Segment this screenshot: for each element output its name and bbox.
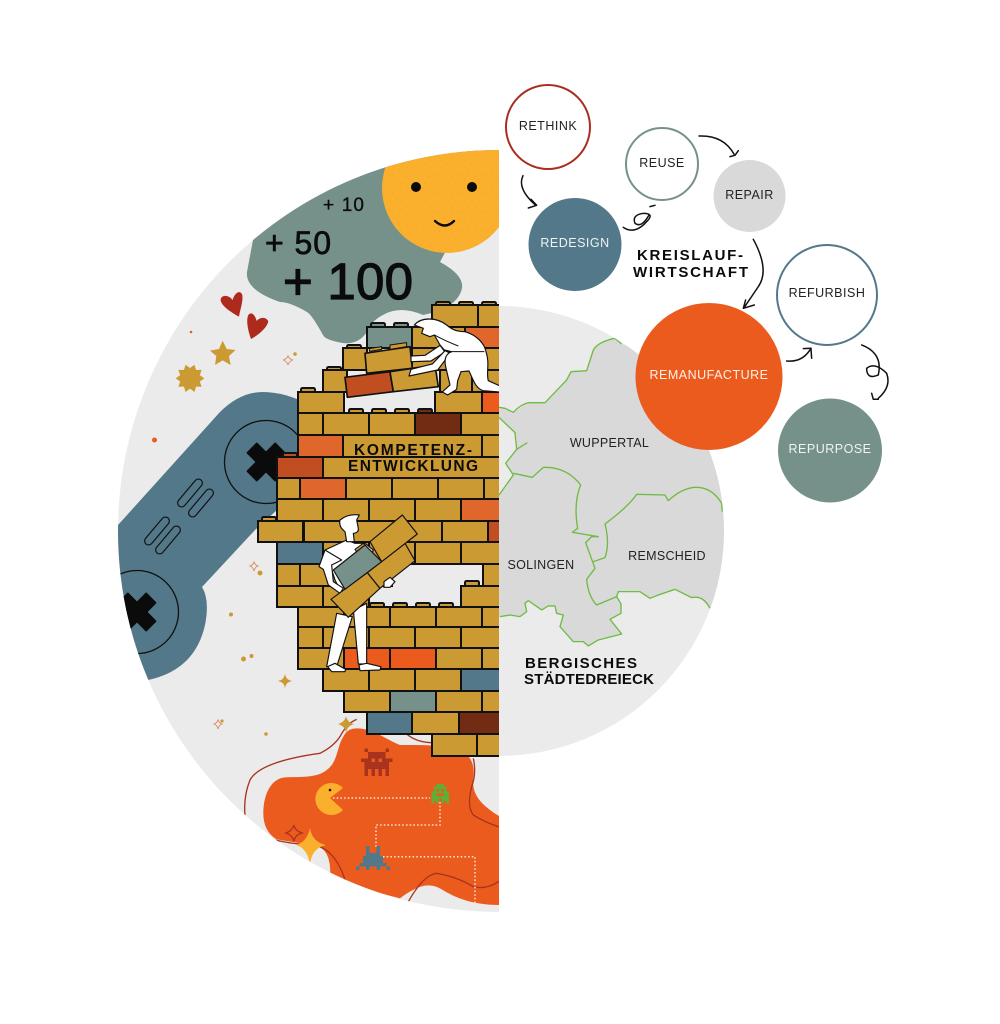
icon: pacman <box>315 783 343 815</box>
icon: gold sparkle in field <box>296 828 326 864</box>
circle: Remanufacture: REMANUFACTURE <box>649 368 769 382</box>
icon: heart one <box>221 292 243 317</box>
arrow: rethink to redesign <box>521 176 537 208</box>
small scattered dots and sparkles <box>152 331 354 736</box>
map of the three cities <box>499 338 735 646</box>
circle: Refurbish: REFURBISH <box>789 286 865 300</box>
arrow: repair to remanufacture <box>743 239 763 308</box>
wall label line 1: Kompetenz: KOMPETENZ- <box>354 442 472 459</box>
arrow: remanufacture to refurbish <box>787 348 812 361</box>
heading: Kreislaufwirtschaft <box>633 247 748 281</box>
hearts and stars group <box>176 292 268 392</box>
arrow: refurbish to repurpose <box>862 345 888 399</box>
heading: Bergisches Städtedreieck: STÄDTEDREIECK <box>524 671 654 688</box>
middle wall rows <box>258 521 503 627</box>
arrow: redesign to reuse <box>623 205 655 230</box>
red contour lines <box>245 719 500 902</box>
circle: Reuse <box>626 128 698 200</box>
heading: Bergisches Städtedreieck: BERGISCHES <box>525 655 637 672</box>
arrows between the circles <box>521 136 888 399</box>
circle: Rethink: RETHINK <box>519 119 577 133</box>
label: Remscheid: REMSCHEID <box>628 549 706 563</box>
circle: Repair: REPAIR <box>725 188 774 202</box>
brick wall <box>258 302 503 756</box>
wall label line 2: Entwicklung: ENTWICKLUNG <box>348 458 478 475</box>
panel: right half disc Bergisches Städtedreieck <box>499 306 735 756</box>
circle: Remanufacture <box>636 303 782 450</box>
blob: orange game field <box>263 728 500 905</box>
circle: Repair <box>714 160 786 232</box>
brick studs <box>262 302 496 607</box>
map labels <box>508 436 706 572</box>
icon: teal space invader <box>356 846 390 870</box>
icon: red space invader <box>361 748 392 776</box>
circle: Refurbish <box>777 245 877 345</box>
icon: green ghost <box>432 784 449 803</box>
circle: Repurpose: REPURPOSE <box>788 442 872 456</box>
figure: man carrying bricks <box>319 515 417 672</box>
panel: left half disc with game scene <box>118 150 499 912</box>
circle: Rethink <box>506 85 590 169</box>
label: Wuppertal: WUPPERTAL <box>570 436 649 450</box>
circle: Repurpose <box>778 398 882 502</box>
icon: heart two <box>247 313 268 339</box>
blob: score background <box>247 150 499 343</box>
circle: Reuse: REUSE <box>639 156 685 170</box>
arrow: reuse to repair <box>699 136 738 157</box>
game controller <box>118 392 297 680</box>
icon: gold spiky sun <box>176 365 204 392</box>
orange game field group <box>245 719 500 905</box>
circle: Redesign: REDESIGN <box>540 236 610 250</box>
circle: Redesign <box>528 198 622 291</box>
heading: Kreislaufwirtschaft: WIRTSCHAFT <box>633 264 748 281</box>
upper wall rows <box>277 305 503 521</box>
score +10: + 10 <box>323 195 364 216</box>
lower wall rows <box>298 627 503 756</box>
heading: Bergisches Städtedreieck <box>524 655 654 688</box>
icon: gold five-point star <box>210 341 236 365</box>
score +50: + 50 <box>265 225 331 261</box>
sun with smiling face <box>382 150 499 253</box>
heading: Kreislaufwirtschaft: KREISLAUF- <box>637 247 743 264</box>
score +100: + 100 <box>283 253 413 310</box>
figure: woman building the wall with tilted bricks <box>345 319 500 397</box>
icon: outline sparkle <box>286 825 302 841</box>
label: Solingen: SOLINGEN <box>508 558 574 572</box>
dotted game path <box>333 798 475 908</box>
